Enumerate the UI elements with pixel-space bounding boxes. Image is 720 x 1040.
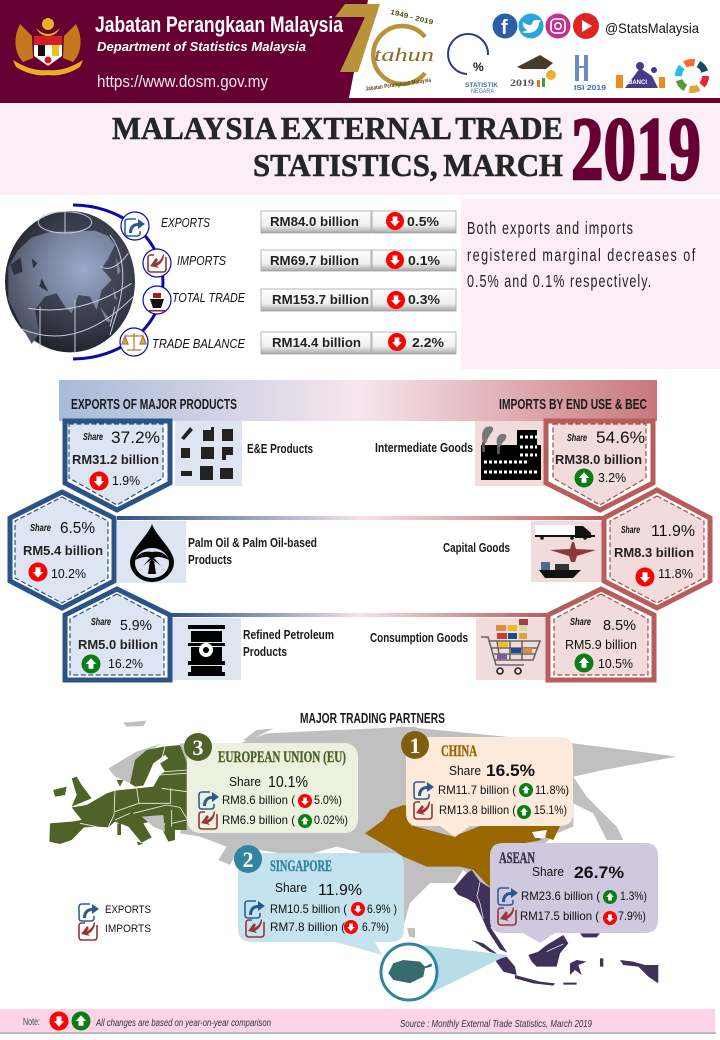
row: imports: 0.1% (408, 254, 440, 268)
panel: china (401, 731, 573, 837)
hexagon: palm oil: Share (30, 523, 51, 534)
hexagon: refined petroleum: RM5.0 billion (78, 638, 158, 652)
product labels: E&E Products (247, 442, 313, 456)
heading: department name: Department of Statistics Malaysia (97, 39, 306, 54)
icon: 70 years logo: 1949 - 2019 (389, 9, 434, 27)
panel: asean: 1.3%) (620, 889, 647, 903)
panel: china: 15.1%) (534, 803, 567, 817)
singapore cone (422, 945, 508, 993)
panel: china: 11.8%) (535, 783, 569, 797)
panel: european union: 10.1% (268, 774, 308, 791)
row: exports: RM84.0 billion (270, 215, 359, 229)
rank badge 2: 2 (242, 847, 254, 872)
panel: singapore: 11.9% (318, 882, 362, 899)
connector lines (117, 516, 607, 617)
icon: imports (143, 249, 171, 277)
panel: singapore: 6.9% ) (367, 902, 397, 916)
product labels: Refined Petroleum (243, 628, 334, 642)
row: exports: 0.5% (407, 215, 439, 229)
social media icons (492, 13, 599, 39)
title (112, 110, 563, 183)
hexagon: palm oil: RM5.4 billion (23, 544, 103, 558)
icon: 70 years logo (335, 4, 434, 93)
icon: 70 years logo: tahun (374, 45, 434, 66)
header banner (0, 0, 720, 103)
hexagon: capital goods: 11.9% (651, 523, 695, 540)
hexagon: consumption goods: RM5.9 billion (565, 638, 637, 652)
panel: european union: EUROPEAN UNION (EU) (218, 749, 346, 766)
hexagon: palm oil: 6.5% (60, 520, 95, 537)
globe with headline indicators (5, 205, 171, 359)
heading: department name (95, 12, 344, 91)
world map (49, 721, 677, 986)
summary text panel: 0.5% and 0.1% respectively. (467, 272, 651, 292)
map: ASEAN (453, 870, 658, 986)
row: exports (261, 211, 456, 233)
row: imports (261, 250, 456, 271)
icon: exports (121, 212, 149, 240)
panel: china: 16.5% (486, 761, 535, 780)
icon: SDG wheel (678, 62, 706, 90)
section header bar (59, 380, 657, 421)
hexagon: consumption goods: 8.5% (603, 617, 636, 634)
panel: china: RM11.7 billion ( (438, 783, 516, 797)
row: imports: RM69.7 billion (270, 254, 359, 268)
icon: Hesyaa 2019: 2019 (510, 78, 535, 88)
heading: major trading partners: MAJOR TRADING PARTNERS (300, 711, 445, 727)
hexagon: E&E (65, 421, 170, 510)
rank badge 1 (401, 731, 429, 759)
summary text panel: registered marginal decreases of (467, 246, 696, 266)
hexagon: refined petroleum: 16.2% (108, 657, 143, 671)
icon: 70 years logo: Jabatan Perangkaan Malaysia (365, 78, 432, 93)
section header bar: IMPORTS BY END USE & BEC (499, 397, 647, 413)
rank badge 3 (184, 733, 212, 761)
product labels: Intermediate Goods (375, 441, 473, 455)
summary text panel (461, 199, 720, 369)
social media icons: f (501, 17, 508, 39)
hexagon: intermediate goods (546, 421, 653, 510)
hexagon: E&E: Share (83, 432, 103, 443)
icon: Banci (616, 62, 665, 88)
footer note bar: Note: (23, 1017, 40, 1028)
social media handle: @StatsMalaysia (605, 20, 699, 36)
icon: globe (5, 211, 135, 353)
panel: asean: ASEAN (499, 850, 535, 867)
panel: china: CHINA (441, 743, 477, 760)
row: total trade (261, 289, 456, 311)
icon: coat of arms (13, 18, 83, 75)
title: STATISTICS, MARCH (253, 147, 563, 183)
panel: singapore: RM10.5 billion ( (270, 902, 347, 916)
map: Norway in grey (108, 743, 162, 783)
hexagon: capital goods: RM8.3 billion (614, 546, 694, 560)
icon boxes (117, 421, 602, 680)
hexagon: capital goods: 11.8% (658, 567, 693, 581)
hexagon: E&E: 37.2% (111, 428, 160, 447)
icon: oil barrel (172, 618, 241, 680)
product labels: Capital Goods (443, 541, 510, 555)
hexagon: intermediate goods: RM38.0 billion (555, 453, 642, 467)
icon: ISI 2019 (574, 55, 606, 92)
panel: european union: 0.02%) (314, 813, 348, 827)
arc (73, 205, 163, 359)
indicator labels: EXPORTS (161, 215, 210, 230)
icon: Hari Statistik Negara: NEGARA (471, 89, 494, 95)
panel: asean: 26.7% (574, 863, 624, 882)
hexagon: refined petroleum (65, 589, 170, 680)
icon: ship (143, 286, 171, 314)
hexagon: consumption goods (548, 589, 654, 680)
heading: department name: Jabatan Perangkaan Malaysia (95, 12, 344, 37)
map: Russia and west Asia (123, 721, 417, 865)
icon: factory (475, 421, 544, 486)
indicator labels (152, 215, 245, 351)
product labels: Products (243, 645, 287, 659)
panel: singapore: RM7.8 billion ( (270, 920, 345, 934)
panel: exports hexagons (10, 421, 170, 680)
panel: imports hexagons (546, 421, 710, 680)
inset: singapore map (381, 944, 437, 1000)
legend: IMPORTS (105, 923, 151, 935)
indicator labels: TRADE BALANCE (152, 336, 245, 351)
icon: Banci: BANCI (628, 80, 647, 86)
panel: singapore (234, 845, 404, 955)
panel: asean: Share (532, 864, 564, 879)
panel: singapore: SINGAPORE (270, 858, 332, 875)
hexagon: E&E: RM31.2 billion (72, 453, 159, 467)
panel: european union: Share (229, 774, 261, 789)
hexagon: intermediate goods: 54.6% (596, 428, 645, 447)
hexagon: E&E: 1.9% (112, 474, 140, 488)
heading: department name: https://www.dosm.gov.my (97, 72, 268, 91)
panel: european union (184, 733, 358, 833)
panel: china: RM13.8 billion ( (439, 803, 516, 817)
hexagon: palm oil (10, 492, 114, 608)
product labels: Palm Oil & Palm Oil-based (188, 536, 317, 550)
indicator labels: TOTAL TRADE (172, 290, 245, 305)
indicator values (261, 211, 456, 354)
footer note bar: Source : Monthly External Trade Statistics, March 2019 (400, 1019, 592, 1030)
row: trade balance: RM14.4 billion (272, 336, 361, 350)
panel: european union: RM6.9 billion ( (222, 813, 295, 827)
map: Europe (49, 745, 187, 845)
product labels (188, 441, 510, 659)
product labels: Products (188, 553, 232, 567)
panel: european union: 5.0%) (314, 793, 342, 807)
icon: E&E products (175, 421, 242, 486)
legend: EXPORTS (105, 904, 151, 916)
hexagon: capital goods: Share (621, 525, 640, 536)
hexagon: consumption goods: Share (570, 617, 591, 628)
panel: asean: RM23.6 billion ( (521, 889, 600, 903)
icon: Hesyaa 2019 (510, 55, 556, 88)
rank badge 3: 3 (192, 735, 204, 760)
partner logos (448, 34, 706, 95)
icon: Hari Statistik Negara: % (473, 60, 484, 74)
map: Bohai sea (532, 830, 547, 838)
indicator labels: IMPORTS (177, 253, 226, 268)
hexagon: refined petroleum: 5.9% (120, 617, 152, 634)
panel: asean: RM17.5 billion ( (520, 909, 599, 923)
rank badge 2 (234, 845, 262, 873)
legend (79, 904, 151, 940)
row: total trade: 0.3% (408, 293, 440, 307)
panel: singapore: 6.7%) (362, 920, 389, 934)
title: MALAYSIA EXTERNAL TRADE (112, 110, 563, 146)
hexagon: refined petroleum: Share (91, 617, 111, 628)
icon: palm oil drop (117, 521, 186, 583)
panel: asean: 7.9%) (618, 909, 646, 923)
icon: scales (120, 328, 148, 356)
hexagon: consumption goods: 10.5% (598, 657, 633, 671)
row: trade balance (261, 332, 456, 354)
footer note bar (0, 1009, 716, 1034)
panel: china: Share (449, 763, 481, 778)
title band (0, 100, 720, 199)
footer note bar: All changes are based on year-on-year comparison (95, 1018, 271, 1029)
icon: shopping cart (476, 618, 546, 680)
panel: singapore: Share (275, 880, 307, 895)
panel: asean (490, 843, 658, 943)
hexagon: intermediate goods: 3.2% (598, 471, 626, 485)
rank badge 1: 1 (410, 733, 420, 758)
section header bar: EXPORTS OF MAJOR PRODUCTS (71, 397, 237, 413)
hexagon: capital goods (604, 490, 710, 608)
map: China (365, 805, 560, 888)
summary text panel: Both exports and imports (467, 219, 633, 239)
panel: european union: RM8.6 billion ( (222, 793, 295, 807)
row: total trade: RM153.7 billion (272, 293, 369, 307)
icon: ISI 2019: ISI 2019 (574, 83, 606, 92)
hexagon: palm oil: 10.2% (51, 567, 86, 581)
product labels: Consumption Goods (370, 631, 468, 645)
row: trade balance: 2.2% (412, 336, 444, 350)
map: east Asia (360, 727, 677, 938)
icon: Hari Statistik Negara: STATISTIK (465, 82, 498, 89)
icon: Hari Statistik Negara (448, 34, 498, 95)
hexagon: intermediate goods: Share (567, 433, 587, 444)
icon: truck plane ship (531, 521, 602, 582)
